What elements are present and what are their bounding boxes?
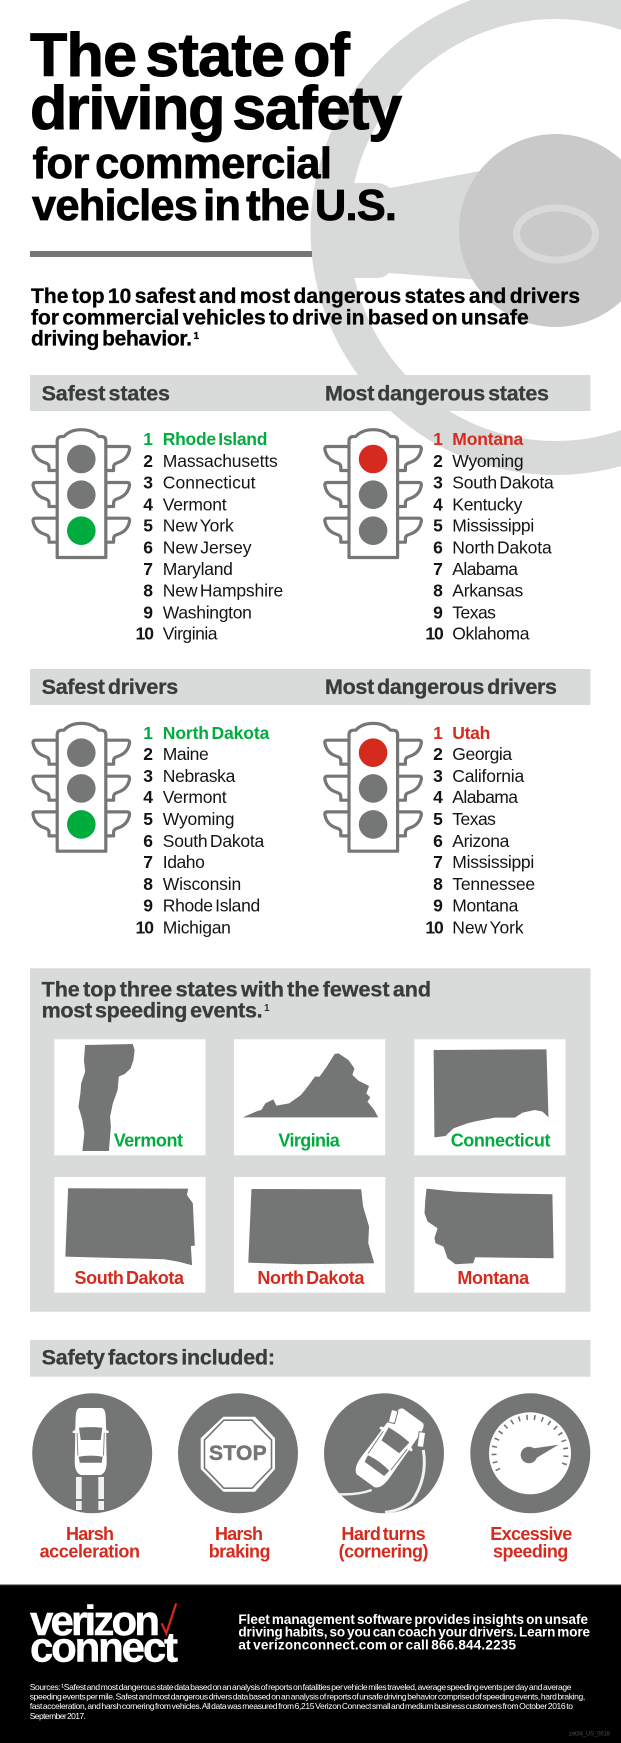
list: safest drivers: North Dakota [163, 723, 270, 743]
card: Virginia [234, 1039, 385, 1155]
list: most dangerous states: Mississippi [452, 515, 534, 535]
list: most dangerous drivers: 10 [425, 917, 444, 937]
list: most dangerous drivers: California [452, 766, 524, 786]
panel: safest and most dangerous states [30, 375, 590, 643]
list: safest states: 2 [143, 451, 153, 471]
list: most dangerous drivers: Utah [452, 723, 490, 743]
call to action: Fleet management software provides insights on unsafe [238, 1612, 588, 1627]
intro text: driving behavior. [31, 328, 192, 350]
list: most dangerous drivers: 8 [433, 874, 443, 894]
list: most dangerous states: Arkansas [452, 580, 523, 600]
heading: speeding events: most speeding events. [42, 998, 263, 1022]
icon: red traffic light [325, 723, 421, 851]
labels: safety factors: braking [209, 1542, 270, 1562]
call to action: driving habits, so you can coach your drivers. Learn more [238, 1625, 590, 1640]
labels: safety factors: Harsh [66, 1524, 114, 1544]
list: safest drivers: Idaho [163, 852, 205, 872]
list: most dangerous states [425, 429, 554, 643]
list: safest drivers: 10 [136, 917, 154, 937]
list: most dangerous drivers: Tennessee [452, 874, 535, 894]
icon: red traffic light [325, 430, 421, 558]
list: safest states: 9 [143, 602, 153, 622]
list: most dangerous states: 10 [425, 623, 444, 643]
list: most dangerous states: Texas [452, 602, 496, 622]
card: Montana: Montana [457, 1268, 530, 1288]
icon: stop sign [178, 1393, 298, 1513]
title: for commercial [32, 140, 332, 188]
icon: speedometer [470, 1393, 590, 1513]
list: most dangerous drivers: 1 [433, 723, 443, 743]
labels: safety factors: Hard turns [341, 1524, 426, 1544]
list: safest states: New York [163, 515, 234, 535]
list: most dangerous states: Oklahoma [452, 623, 530, 643]
list: safest drivers: Rhode Island [163, 896, 260, 916]
list: safest drivers: 4 [143, 787, 153, 807]
labels: safety factors: acceleration [40, 1542, 140, 1562]
intro text: The top 10 safest and most dangerous states and drivers [31, 285, 580, 308]
labels: safety factors: (cornering) [339, 1542, 428, 1562]
icon: green traffic light [33, 430, 130, 558]
list: most dangerous states: 3 [433, 472, 443, 492]
list: safest drivers: Nebraska [163, 766, 236, 786]
list: most dangerous drivers: Montana [452, 896, 519, 916]
call to action: at verizonconnect.com or call 866.844.2235 [238, 1637, 516, 1652]
icon: stop sign: STOP [209, 1442, 267, 1465]
list: most dangerous states: 5 [433, 515, 443, 535]
list: most dangerous states: 9 [433, 602, 443, 622]
list: safest drivers: 2 [143, 744, 153, 764]
card: Vermont: Vermont [114, 1131, 183, 1151]
list: most dangerous states: 1 [433, 429, 443, 449]
list: safest states [136, 429, 283, 643]
intro text [31, 285, 580, 350]
list: most dangerous states: Alabama [452, 559, 518, 579]
list: safest drivers: Vermont [163, 787, 227, 807]
sources [30, 1682, 585, 1721]
icon: harsh acceleration car [32, 1393, 152, 1513]
heading: speeding events: The top three states with the fewest and [42, 978, 431, 1002]
card: Vermont [54, 1039, 205, 1155]
list: most dangerous states: 8 [433, 580, 443, 600]
list: safest states: 1 [143, 429, 153, 449]
list: safest states: Virginia [163, 623, 218, 643]
header bar: drivers: Safest drivers [42, 675, 178, 699]
header bar: safety factors [30, 1340, 590, 1377]
list: most dangerous drivers: Alabama [452, 787, 518, 807]
list: most dangerous drivers: Arizona [452, 831, 510, 851]
list: safest states: Connecticut [163, 472, 256, 492]
list: most dangerous states: 7 [433, 559, 443, 579]
header bar: states [30, 375, 590, 411]
list: safest drivers: 1 [143, 723, 153, 743]
list: most dangerous states: Montana [452, 429, 523, 449]
icon: steering wheel background [310, 0, 621, 475]
card: South Dakota: South Dakota [74, 1268, 185, 1288]
labels: safety factors: Harsh [215, 1524, 263, 1544]
list: safest drivers: 3 [143, 766, 153, 786]
list: safest states: Maryland [163, 559, 233, 579]
list: safest drivers: South Dakota [163, 831, 264, 851]
title: The state of [30, 21, 351, 89]
list: safest states: Vermont [163, 494, 227, 514]
list: safest states: 6 [143, 537, 153, 557]
labels: safety factors [40, 1524, 572, 1562]
sources: speeding events per mile. Safest and most dangerous drivers data based on an analysis of reports of unsafe driving behavior comprised of speeding events, hard braking, [30, 1692, 585, 1702]
card: North Dakota: North Dakota [257, 1268, 365, 1288]
list: most dangerous drivers: 9 [433, 896, 443, 916]
list: safest states: 5 [143, 515, 153, 535]
logo: verizon connect [30, 1597, 178, 1671]
list: safest drivers: 7 [143, 852, 153, 872]
list: most dangerous states: North Dakota [452, 537, 552, 557]
list: most dangerous states: South Dakota [452, 472, 554, 492]
list: safest states: Massachusetts [163, 451, 278, 471]
header bar: safety factors: Safety factors included: [42, 1345, 275, 1369]
list: safest states: Rhode Island [163, 429, 267, 449]
list: safest states: New Jersey [163, 537, 252, 557]
list: most dangerous drivers: Texas [452, 809, 496, 829]
list: most dangerous drivers: 3 [433, 766, 443, 786]
card: Connecticut: Connecticut [451, 1131, 550, 1151]
job code: zet34_US_0618 [569, 1732, 611, 1738]
list: safest drivers: 6 [143, 831, 153, 851]
panel: speeding events [30, 968, 590, 1312]
list: most dangerous drivers: 5 [433, 809, 443, 829]
list: safest drivers: Wyoming [163, 809, 234, 829]
header bar: drivers [30, 669, 590, 705]
list: safest drivers [136, 723, 270, 937]
title: driving safety [30, 74, 402, 142]
list: most dangerous states: Kentucky [452, 494, 523, 514]
list: safest states: New Hampshire [163, 580, 283, 600]
card: Virginia: Virginia [278, 1131, 341, 1151]
list: most dangerous drivers: 6 [433, 831, 443, 851]
list: most dangerous drivers: 2 [433, 744, 443, 764]
list: safest states: 4 [143, 494, 153, 514]
card: South Dakota [54, 1177, 205, 1293]
labels: safety factors: Excessive [490, 1524, 572, 1544]
sources: September 2017. [30, 1711, 86, 1721]
panel: safest and most dangerous drivers [30, 669, 590, 937]
title rule [30, 251, 312, 257]
icon: hard turn car [324, 1393, 444, 1513]
list: safest states: Washington [163, 602, 252, 622]
sources: Sources: ¹Safest and most dangerous state data based on an analysis of reports on fatalities per vehicle miles traveled, average speeding events per day and average [30, 1682, 572, 1692]
list: most dangerous drivers [425, 723, 535, 937]
list: safest states: 3 [143, 472, 153, 492]
list: safest drivers: Maine [163, 744, 209, 764]
title [30, 21, 402, 230]
list: most dangerous drivers: Mississippi [452, 852, 534, 872]
intro text: 1 [194, 331, 200, 342]
list: most dangerous drivers: 7 [433, 852, 443, 872]
icon: green traffic light [33, 723, 130, 851]
list: most dangerous states: 6 [433, 537, 443, 557]
intro text: for commercial vehicles to drive in based on unsafe [31, 306, 529, 330]
card: North Dakota [234, 1177, 385, 1293]
sources: fast acceleration, and harsh cornering from vehicles. All data was measured from 6,215 Verizon Connect small and medium business customers from October 2016 to [30, 1701, 573, 1711]
card: Connecticut [414, 1039, 566, 1155]
list: safest drivers: 9 [143, 896, 153, 916]
list: most dangerous drivers: New York [452, 917, 524, 937]
logo: verizon connect: verizon [30, 1597, 160, 1644]
header bar: states: Most dangerous states [325, 382, 549, 406]
header bar: states: Safest states [42, 382, 170, 406]
heading: speeding events [42, 978, 431, 1022]
card: Montana [414, 1177, 566, 1293]
list: safest states: 10 [136, 623, 154, 643]
list: most dangerous drivers: Georgia [452, 744, 512, 764]
logo: verizon connect: connect [30, 1624, 178, 1671]
footer [0, 1584, 621, 1743]
list: safest drivers: Michigan [163, 917, 231, 937]
title: vehicles in the U.S. [32, 182, 397, 230]
list: safest drivers: 8 [143, 874, 153, 894]
panel: safety factors [30, 1340, 590, 1562]
list: safest drivers: Wisconsin [163, 874, 241, 894]
list: most dangerous states: Wyoming [452, 451, 524, 471]
list: most dangerous states: 2 [433, 451, 443, 471]
list: most dangerous states: 4 [433, 494, 443, 514]
heading: speeding events: 1 [264, 1003, 270, 1014]
list: safest drivers: 5 [143, 809, 153, 829]
labels: safety factors: speeding [493, 1542, 568, 1562]
header bar: drivers: Most dangerous drivers [325, 675, 557, 699]
list: most dangerous drivers: 4 [433, 787, 443, 807]
call to action [238, 1612, 590, 1652]
list: safest states: 8 [143, 580, 153, 600]
list: safest states: 7 [143, 559, 153, 579]
